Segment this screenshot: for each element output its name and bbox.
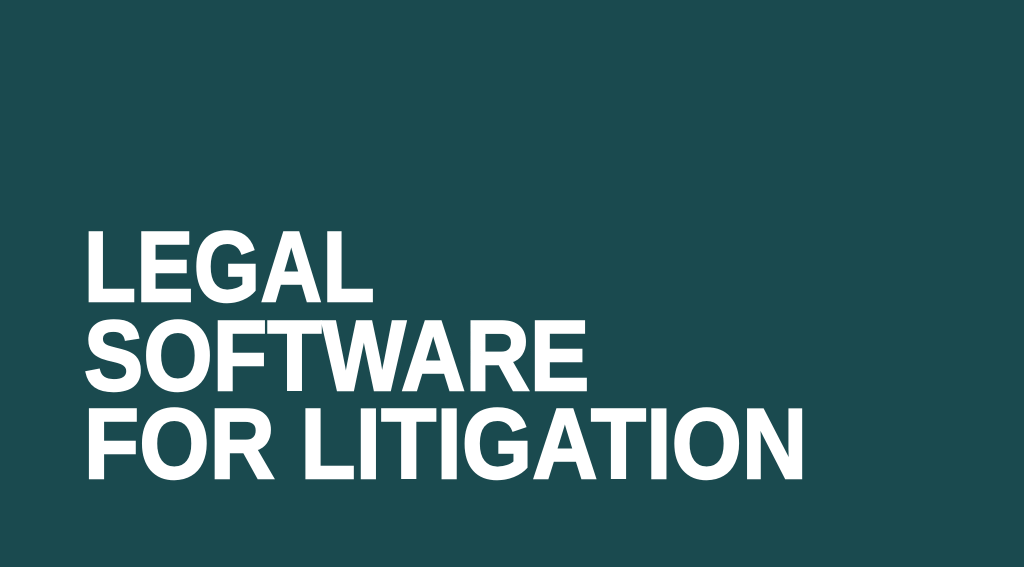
title: SOFTWARE bbox=[84, 300, 590, 411]
title: FOR LITIGATION bbox=[84, 388, 807, 499]
title: LEGAL bbox=[84, 211, 375, 322]
title bbox=[84, 211, 807, 499]
